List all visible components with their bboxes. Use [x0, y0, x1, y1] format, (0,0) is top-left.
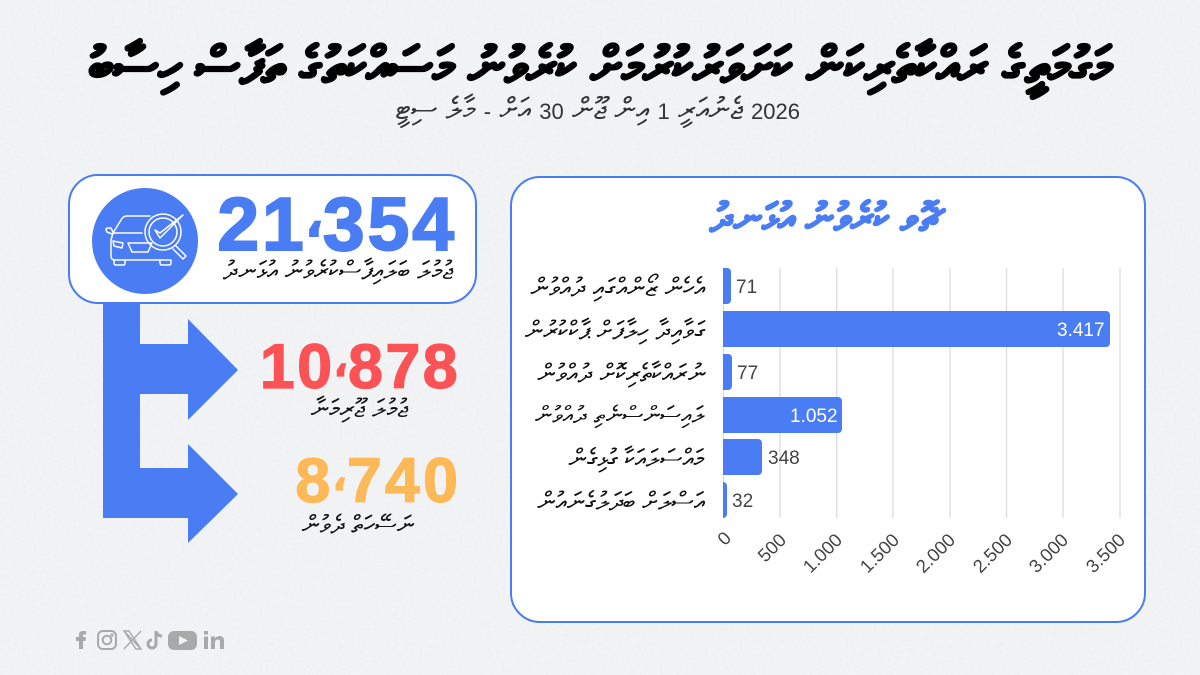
bar values — [732, 277, 1105, 512]
x axis labels: 3.500 — [1081, 529, 1129, 577]
icon: facebook — [76, 631, 86, 649]
fined label: ޖުމުލަ ޖޫރިމަނާ — [311, 395, 408, 423]
panel: total vehicles checked — [68, 174, 477, 304]
x axis labels: 1.500 — [855, 529, 903, 577]
chart title: ޗޮވ ކުރެވުނު އުޅަނދު — [710, 196, 943, 240]
bar values: 3.417 — [1057, 320, 1105, 341]
icon: tiktok — [148, 631, 162, 648]
fined number: ، — [334, 343, 348, 384]
arrows: flow from total to outcomes — [103, 304, 238, 543]
x axis labels — [713, 527, 1129, 577]
bar values: 1.052 — [790, 406, 838, 427]
total number: ، — [306, 198, 322, 246]
category labels: ލައިސަންސްނެތި ދުއްވުން — [535, 402, 705, 429]
bars — [723, 268, 1110, 518]
icon: x — [124, 631, 141, 649]
x axis labels: 0 — [713, 527, 735, 549]
x axis labels: 1.000 — [798, 529, 846, 577]
total number: 21354 — [217, 182, 457, 266]
advised number: 8740 — [295, 446, 461, 516]
title: މަގުމަތީގެ ރައްކާތެރިކަން ކަށަވަރުކުރުމަށް ކުރެވުނު މަސައްކަތުގެ ތަފާސް ހިސާބު — [89, 37, 1111, 94]
advised label: ނަސޭހަތް ދެވުން — [302, 511, 414, 539]
icon: car inspection — [92, 188, 198, 294]
social media icons — [76, 630, 224, 650]
bar values: 77 — [737, 363, 758, 384]
fined number: 10878 — [260, 332, 460, 402]
icon: youtube — [168, 631, 197, 650]
icon: instagram — [98, 631, 116, 649]
stat: advised — [295, 446, 461, 539]
x axis labels: 2.500 — [968, 529, 1016, 577]
advised number: ، — [333, 457, 347, 498]
category labels: މައްސަލައަކާ ގުޅިގެން — [568, 445, 705, 473]
bar values: 348 — [768, 448, 800, 469]
category labels — [524, 274, 706, 516]
bar values: 71 — [736, 277, 757, 298]
x axis labels: 500 — [753, 529, 790, 566]
bar values: 32 — [732, 491, 753, 512]
category labels: ގަވާއިދާ ހިލާފަށް ޕާކްކުރުން — [525, 317, 705, 345]
category labels: އަސްލަށް ބަދަލުގެނައުން — [537, 488, 705, 516]
subtitle: date range: 2026 ޖެނުއަރީ 1 އިން ޖޫން 30 އަށް - މާލެ ސިޓީ — [396, 93, 800, 126]
icon: linkedin — [204, 631, 224, 649]
x axis labels: 2.000 — [911, 529, 959, 577]
category labels: ނުރައްކާތެރިކޮށް ދުއްވުން — [537, 360, 705, 388]
x axis labels: 3.000 — [1024, 529, 1072, 577]
panel: bar chart — [510, 176, 1146, 623]
total label: ޖުމުލަ ބަލައިފާސްކުރެވުނު އުޅަނދު — [223, 257, 453, 285]
category labels: އެހެން ޒޯންއްގައި ދުއްވުން — [530, 274, 705, 302]
stat: fined — [260, 332, 460, 423]
